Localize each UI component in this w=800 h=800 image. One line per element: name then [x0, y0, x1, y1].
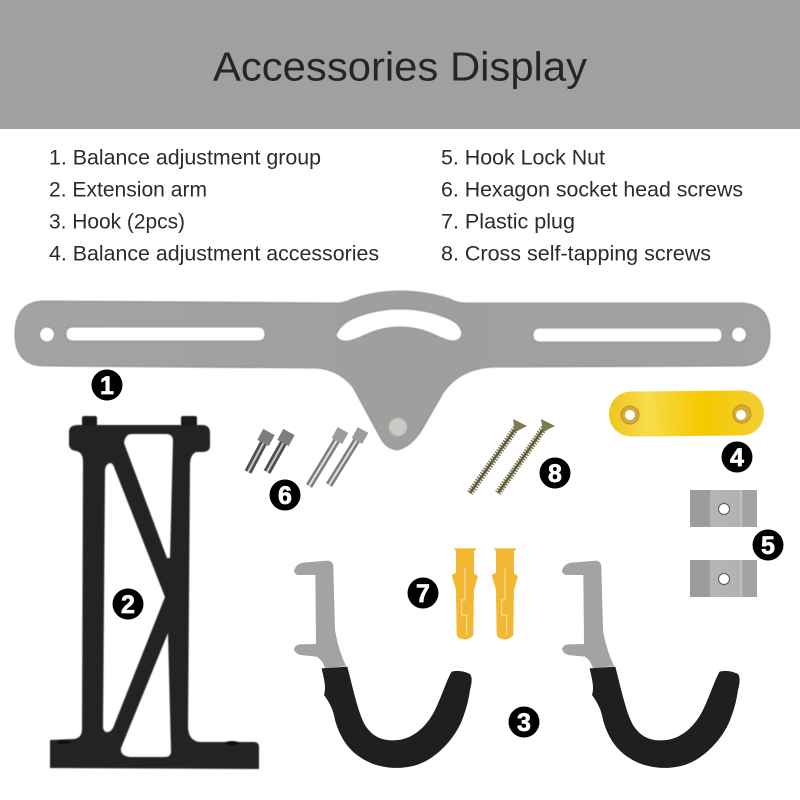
number badge 7 — [408, 578, 438, 608]
parts list: left column — [49, 146, 379, 266]
number badge 6: 6 — [278, 482, 292, 510]
number badge 1 — [92, 370, 122, 400]
parts list: left column: 3. Hook (2pcs) — [49, 210, 185, 234]
parts list: right column: 8. Cross self-tapping screws — [441, 242, 711, 266]
part 7: plastic plugs — [452, 548, 518, 639]
parts list: right column — [441, 146, 743, 266]
number badge 5: 5 — [761, 532, 775, 560]
number badge 8: 8 — [548, 460, 562, 488]
part 5: hook lock nuts — [690, 490, 757, 597]
number badge 6 — [270, 480, 300, 510]
part 8: cross self-tapping screws — [470, 419, 555, 493]
header band — [0, 0, 800, 129]
number badge 4: 4 — [730, 444, 744, 472]
number badge 2 — [112, 588, 144, 620]
parts list: left column: 2. Extension arm — [49, 178, 207, 202]
number badge 5 — [752, 530, 784, 560]
number badge 3: 3 — [517, 709, 531, 737]
part 6: hexagon socket head screws — [248, 430, 363, 486]
parts list: right column: 5. Hook Lock Nut — [441, 146, 605, 170]
number badge 7: 7 — [416, 580, 430, 608]
number badge 4 — [722, 442, 752, 472]
number badge 2: 2 — [121, 591, 135, 619]
part 3: left hook — [294, 561, 472, 768]
number badge 1: 1 — [100, 372, 114, 400]
part 3: right hook — [562, 561, 740, 768]
number badge 8 — [540, 458, 570, 488]
parts list: left column: 4. Balance adjustment accessories — [49, 242, 379, 266]
part 2: extension arm — [50, 416, 259, 769]
title: Accessories Display — [213, 44, 588, 90]
parts list: right column: 6. Hexagon socket head screws — [441, 178, 743, 202]
part 1: balance adjustment bar — [15, 291, 770, 450]
parts list: right column: 7. Plastic plug — [441, 210, 575, 234]
parts list: left column: 1. Balance adjustment group — [49, 146, 321, 170]
part 4: yellow balance plate — [609, 390, 764, 437]
number badge 3 — [508, 706, 540, 738]
